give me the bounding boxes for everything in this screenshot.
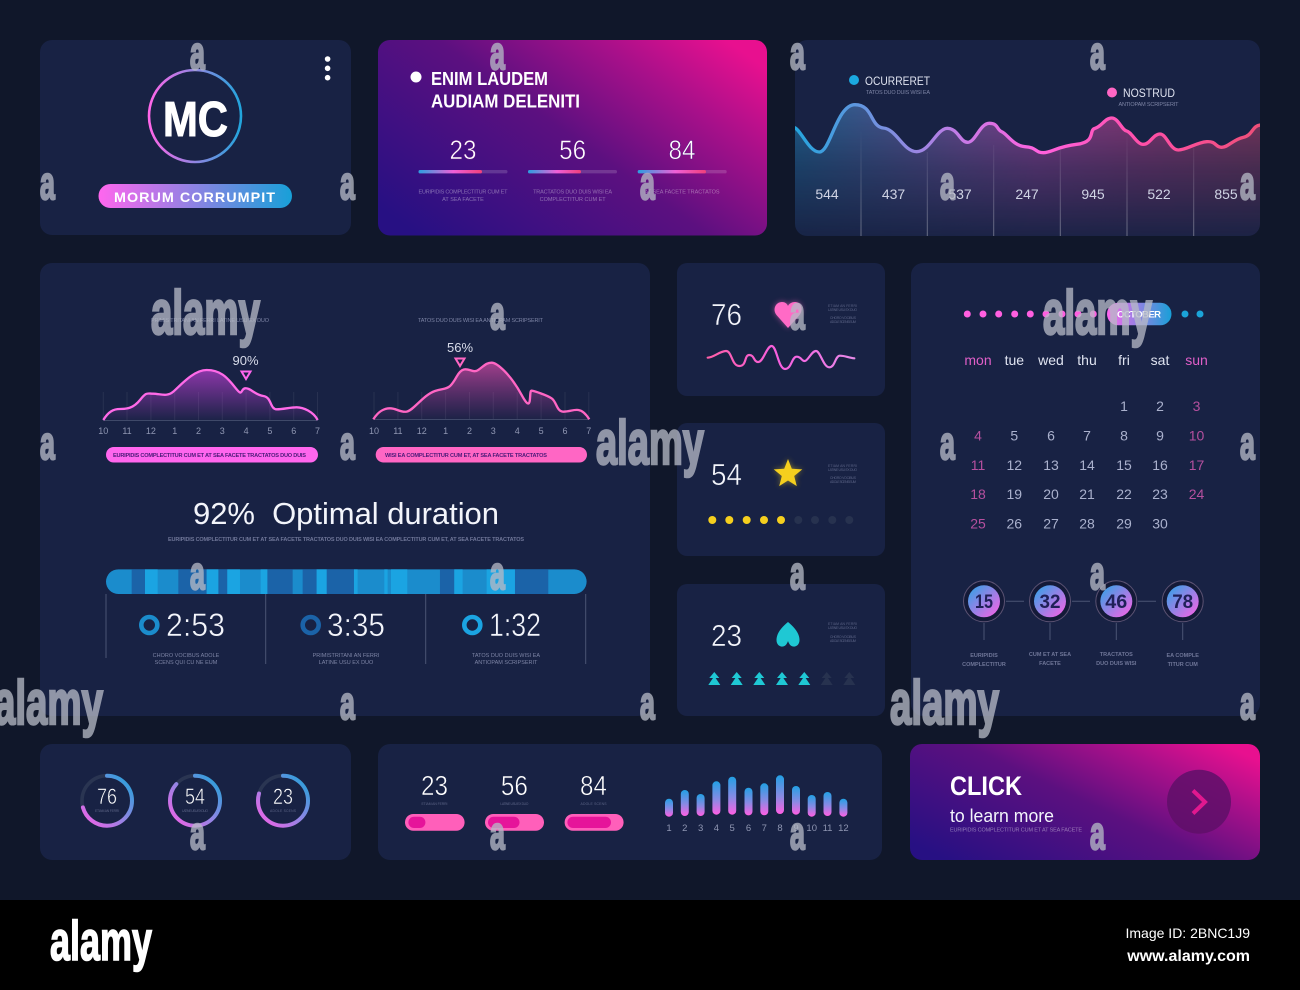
legend: nostrud bbox=[1107, 86, 1179, 108]
bar chart: 7 bbox=[762, 823, 767, 834]
toggle: 23: ETIAM AN FERRI bbox=[422, 802, 448, 806]
icon: menu dots bbox=[325, 56, 330, 80]
stat: 56 bbox=[528, 135, 617, 203]
stat: 56: COMPLECTITUR CUM ET bbox=[540, 197, 606, 203]
ring: 76 bbox=[82, 776, 132, 826]
bar chart: 6 bbox=[746, 823, 751, 834]
calendar days: 24 bbox=[1189, 486, 1204, 502]
icon: star bbox=[774, 459, 802, 486]
calendar days: 25 bbox=[970, 516, 986, 532]
connector lines bbox=[984, 601, 1183, 640]
left mini chart: 12 bbox=[146, 426, 156, 436]
small caption: ADOLE SCENS EUM bbox=[830, 320, 856, 324]
small caption: LATINE USU EX DUO bbox=[828, 468, 857, 472]
calendar days: 10 bbox=[1189, 428, 1204, 444]
site url: www.alamy.com bbox=[1126, 948, 1250, 965]
small caption: LATINE USU EX DUO bbox=[828, 308, 857, 312]
left mini chart: 4 bbox=[244, 426, 249, 436]
left mini chart: 5 bbox=[267, 426, 272, 436]
weekday headers: fri bbox=[1118, 352, 1130, 368]
right mini chart: 5 bbox=[539, 426, 544, 436]
watermark: repeated marks: a bbox=[340, 417, 356, 469]
left mini chart: 90% bbox=[232, 353, 259, 368]
calendar days: 20 bbox=[1043, 486, 1059, 502]
watermark: repeated marks: a bbox=[640, 677, 656, 729]
calendar days: 29 bbox=[1116, 516, 1132, 532]
watermark: repeated marks: a bbox=[1090, 547, 1106, 599]
watermark: repeated marks: a bbox=[340, 677, 356, 729]
step: 32 bbox=[1029, 581, 1071, 667]
stat: 23: AT SEA FACETE bbox=[442, 197, 484, 203]
small caption: CHORO VOCIBUS bbox=[830, 635, 857, 639]
chart values: 437 bbox=[882, 186, 905, 202]
calendar days: 8 bbox=[1120, 428, 1128, 444]
calendar days: 19 bbox=[1007, 486, 1022, 502]
step: 46: 46 bbox=[1105, 592, 1127, 613]
panel: calendar bbox=[911, 263, 1260, 716]
panel: call to action: to learn more bbox=[950, 806, 1054, 826]
bar chart bbox=[665, 775, 849, 834]
bar chart: 9 bbox=[793, 823, 799, 834]
right mini chart: 3 bbox=[491, 426, 496, 436]
right mini chart: 1 bbox=[443, 426, 448, 436]
right mini chart: 10 bbox=[369, 426, 379, 436]
step: 32: 32 bbox=[1040, 592, 1060, 613]
calendar days: 3 bbox=[1193, 398, 1201, 414]
step: 46: DUO DUIS WISI bbox=[1096, 661, 1137, 667]
stat: 84 bbox=[638, 135, 727, 196]
heading: ENIM LAUDEM bbox=[431, 69, 548, 89]
toggle: 23 bbox=[405, 770, 465, 831]
right mini chart: 6 bbox=[562, 426, 568, 436]
footer bar bbox=[0, 900, 1300, 990]
legend: nostrud: ANTIOPAM SCRIPSERIT bbox=[1118, 102, 1179, 108]
small caption: CHORO VOCIBUS bbox=[830, 476, 857, 480]
heading: AUDIAM DELENITI bbox=[431, 92, 580, 112]
weekday headers: sun bbox=[1185, 352, 1208, 368]
ring: 54: 54 bbox=[185, 784, 205, 809]
image id: Image ID: 2BNC1J9 bbox=[1126, 925, 1250, 941]
weekday headers: thu bbox=[1077, 352, 1097, 368]
icon: MC monogram ring bbox=[149, 70, 241, 162]
calendar days: 16 bbox=[1152, 457, 1168, 473]
headline bbox=[168, 496, 524, 543]
calendar days: 23 bbox=[1152, 486, 1168, 502]
bar chart: 8 bbox=[777, 823, 783, 834]
watermark: repeated marks: a bbox=[340, 157, 356, 209]
right mini chart: 56% bbox=[447, 340, 473, 355]
footer logo: alamy bbox=[50, 909, 152, 972]
calendar days: 2 bbox=[1156, 398, 1164, 414]
stat: 23: EURIPIDIS COMPLECTITUR CUM ET bbox=[418, 190, 508, 196]
stat: 84: AT SEA FACETE TRACTATOS bbox=[644, 190, 720, 196]
right mini chart: 4 bbox=[515, 426, 520, 436]
watermark: repeated marks: a bbox=[1090, 807, 1106, 859]
watermark: repeated marks: a bbox=[190, 807, 206, 859]
calendar days: 14 bbox=[1079, 457, 1095, 473]
panel: heart rate: 76 bbox=[711, 297, 742, 332]
calendar days: 28 bbox=[1079, 516, 1095, 532]
panel: progress rings bbox=[40, 744, 351, 860]
left mini chart bbox=[98, 318, 320, 462]
step: 15: COMPLECTITUR bbox=[962, 662, 1006, 668]
step: 78: EA COMPLE bbox=[1166, 653, 1199, 659]
toggle: 84 bbox=[565, 770, 624, 831]
small caption bbox=[828, 304, 857, 324]
time: 3:35 bbox=[303, 607, 385, 666]
chart values: 544 bbox=[815, 186, 839, 202]
watermark: repeated marks: alamy bbox=[596, 409, 704, 478]
month selector: OCTOBER bbox=[1117, 310, 1161, 320]
calendar days: 26 bbox=[1007, 516, 1022, 532]
left mini chart: 6 bbox=[291, 426, 296, 436]
bar chart: 4 bbox=[714, 823, 719, 834]
heading bbox=[410, 69, 580, 112]
area chart bbox=[793, 105, 1262, 238]
time: 1:32: 1:32 bbox=[489, 607, 541, 643]
watermark: repeated marks: a bbox=[790, 547, 806, 599]
calendar days: 18 bbox=[970, 486, 986, 502]
panel: toggles and bars bbox=[378, 744, 882, 860]
calendar days: 5 bbox=[1010, 428, 1018, 444]
time: 1:32 bbox=[464, 607, 541, 666]
headline: 92% Optimal duration bbox=[193, 496, 499, 531]
stripe timeline bar bbox=[106, 569, 587, 594]
left mini chart: 2 bbox=[196, 426, 201, 436]
panel: call to action: CLICK bbox=[950, 771, 1022, 801]
chart values: 522 bbox=[1147, 186, 1171, 202]
small caption: LATINE USU EX DUO bbox=[828, 626, 857, 630]
time: 2:53: 2:53 bbox=[166, 607, 225, 643]
calendar days bbox=[970, 398, 1204, 532]
watermark: repeated marks: alamy bbox=[151, 279, 260, 348]
weekday headers: tue bbox=[1005, 352, 1024, 368]
watermark: repeated marks: a bbox=[1240, 157, 1256, 209]
ring: 23: 23 bbox=[273, 784, 293, 809]
icon: MC monogram ring: MC bbox=[163, 93, 228, 147]
calendar days: 27 bbox=[1043, 516, 1059, 532]
time: 1:32: TATOS DUO DUIS WISI EA bbox=[472, 653, 540, 659]
watermark: repeated marks: a bbox=[790, 27, 806, 79]
right mini chart: WISI EA COMPLECTITUR CUM ET, AT SEA FACETE TRACTATOS bbox=[385, 453, 547, 459]
rating dots bbox=[708, 516, 853, 524]
watermark: repeated marks: a bbox=[490, 287, 506, 339]
arrow button bbox=[1167, 770, 1231, 834]
weekday headers: mon bbox=[964, 352, 992, 368]
panel: sleep duration bbox=[40, 263, 650, 716]
step: 46 bbox=[1096, 581, 1137, 667]
stat: 23: 23 bbox=[450, 135, 476, 165]
step: 32: FACETE bbox=[1039, 661, 1061, 667]
panel: rating: 54 bbox=[711, 457, 742, 492]
watermark: repeated marks: a bbox=[40, 417, 56, 469]
step: 15: EURIPIDIS bbox=[970, 653, 998, 659]
weekday headers: wed bbox=[1037, 352, 1064, 368]
bar chart: 1 bbox=[666, 823, 672, 834]
time: 2:53: SCENS QUI CU NE EUM bbox=[155, 660, 218, 666]
right mini chart: 11 bbox=[393, 426, 403, 436]
pulse wave bbox=[708, 346, 854, 369]
step: 15: 15 bbox=[975, 592, 993, 613]
small caption bbox=[828, 622, 857, 643]
watermark: repeated marks: a bbox=[940, 157, 956, 209]
stat: 84: 84 bbox=[668, 135, 696, 165]
ring: 76: 76 bbox=[97, 784, 117, 809]
calendar days: 4 bbox=[974, 428, 982, 444]
watermark: repeated marks: alamy bbox=[1043, 279, 1152, 348]
right mini chart: 7 bbox=[586, 426, 591, 436]
calendar days: 11 bbox=[971, 457, 985, 473]
calendar days: 17 bbox=[1189, 457, 1204, 473]
bar chart: 11 bbox=[823, 823, 832, 834]
toggle: 84: ADOLE SCENS bbox=[580, 802, 607, 806]
time: 2:53 bbox=[141, 607, 225, 666]
ring: 54: LATINE USU EX DUO bbox=[182, 809, 208, 813]
legend: ocurreret: TATOS DUO DUIS WISI EA bbox=[866, 90, 930, 96]
toggle: 56: LATINE USU EX DUO bbox=[500, 802, 529, 806]
watermark: repeated marks: a bbox=[40, 157, 56, 209]
calendar days: 21 bbox=[1079, 486, 1095, 502]
time: 3:35: LATINE USU EX DUO bbox=[319, 660, 374, 666]
bar chart: 5 bbox=[730, 823, 735, 834]
bar chart: 10 bbox=[806, 823, 817, 834]
left mini chart: 11 bbox=[122, 426, 132, 436]
calendar days: 6 bbox=[1047, 428, 1055, 444]
panel: line chart bbox=[793, 40, 1262, 238]
left mini chart: 3 bbox=[220, 426, 225, 436]
watermark: repeated marks: a bbox=[790, 287, 806, 339]
bar chart: 3 bbox=[698, 823, 703, 834]
panel: drops bbox=[677, 584, 885, 716]
panel: call to action bbox=[910, 744, 1260, 860]
stat: 56: 56 bbox=[559, 135, 586, 165]
watermark: repeated marks: a bbox=[490, 27, 506, 79]
right mini chart: 12 bbox=[417, 426, 427, 436]
watermark: repeated marks: a bbox=[640, 157, 656, 209]
toggle: 56 bbox=[485, 770, 544, 831]
right mini chart bbox=[369, 318, 591, 462]
chart values: 537 bbox=[948, 186, 972, 202]
calendar days: 13 bbox=[1043, 457, 1059, 473]
right mini chart: TATOS DUO DUIS WISI EA ANTIOPAM SCRIPSERIT bbox=[418, 318, 544, 324]
watermark: repeated marks: a bbox=[790, 807, 806, 859]
icon: heart bbox=[775, 302, 802, 328]
step: 78: TITUR CUM bbox=[1168, 662, 1198, 668]
calendar days: 1 bbox=[1120, 398, 1128, 414]
calendar days: 9 bbox=[1156, 428, 1164, 444]
step: 46: TRACTATOS bbox=[1100, 652, 1133, 658]
weekday headers: sat bbox=[1151, 352, 1169, 368]
time: 1:32: ANTIOPAM SCRIPSERIT bbox=[475, 660, 538, 666]
right mini chart: 2 bbox=[467, 426, 472, 436]
legend: ocurreret: OCURRERET bbox=[865, 74, 931, 88]
tree row bbox=[708, 672, 855, 685]
legend: nostrud: NOSTRUD bbox=[1123, 86, 1175, 100]
calendar days: 7 bbox=[1083, 428, 1091, 444]
stat: 56: TRACTATOS DUO DUIS WISI EA bbox=[533, 190, 612, 196]
ring: 54 bbox=[170, 776, 220, 826]
bar chart: 2 bbox=[682, 823, 687, 834]
icon: leaf drop bbox=[776, 622, 800, 647]
left mini chart: PRIMIS TRITANI AN FERRI LATINE USU EX DUO bbox=[151, 318, 270, 324]
stat: 23 bbox=[418, 135, 508, 203]
panel: gradient stats bbox=[378, 40, 767, 236]
small caption: ETIAM AN FERRI bbox=[828, 464, 857, 468]
calendar days: 12 bbox=[1007, 457, 1022, 473]
time: 3:35: PRIMISTRITANI AN FERRI bbox=[313, 653, 380, 659]
watermark: repeated marks: a bbox=[940, 417, 956, 469]
weekday headers bbox=[964, 352, 1208, 368]
panel: drops: 23 bbox=[711, 618, 742, 653]
small caption: ETIAM AN FERRI bbox=[828, 622, 857, 626]
panel: rating bbox=[677, 423, 885, 556]
calendar days: 15 bbox=[1116, 457, 1132, 473]
calendar days: 22 bbox=[1116, 486, 1132, 502]
chart values: 247 bbox=[1015, 186, 1039, 202]
chart values bbox=[815, 186, 1238, 202]
chart values: 855 bbox=[1214, 186, 1238, 202]
watermark: repeated marks: a bbox=[1240, 417, 1256, 469]
time: 2:53: CHORO VOCIBUS ADOLE bbox=[153, 653, 220, 659]
name pill bbox=[98, 184, 292, 208]
watermark: repeated marks: a bbox=[190, 547, 206, 599]
ring: 76: ETIAM AN FERRI bbox=[95, 809, 119, 813]
watermark: repeated marks: a bbox=[190, 27, 206, 79]
step: 78 bbox=[1162, 581, 1203, 668]
ring: 23 bbox=[258, 776, 308, 826]
small caption: ADOLE SCENS EUM bbox=[830, 480, 856, 484]
left mini chart: 10 bbox=[98, 426, 108, 436]
name pill: MORUM CORRUMPIT bbox=[114, 189, 276, 205]
time: 3:35: 3:35 bbox=[327, 607, 385, 643]
watermark: repeated marks: a bbox=[1240, 677, 1256, 729]
step: 32: CUM ET AT SEA bbox=[1029, 652, 1071, 658]
toggle: 56: 56 bbox=[501, 770, 528, 801]
watermark: repeated marks: a bbox=[1090, 27, 1106, 79]
chart values: 945 bbox=[1081, 186, 1105, 202]
bar chart: 12 bbox=[838, 823, 849, 834]
panel: heart rate bbox=[677, 263, 885, 396]
watermark: repeated marks: a bbox=[490, 807, 506, 859]
panel: profile badge bbox=[40, 40, 351, 235]
ring: 23: ADOLE SCENS bbox=[270, 809, 297, 813]
small caption: CHORO VOCIBUS bbox=[830, 316, 857, 320]
small caption: ETIAM AN FERRI bbox=[828, 304, 857, 308]
small caption: ADOLE SCENS EUM bbox=[830, 639, 856, 643]
step: 15 bbox=[962, 581, 1006, 668]
month selector bbox=[964, 303, 1204, 325]
left mini chart: EURIPIDIS COMPLECTITUR CUM ET AT SEA FACETE TRACTATOS DUO DUIS bbox=[113, 453, 306, 459]
small caption bbox=[828, 464, 857, 484]
headline: EURIPIDIS COMPLECTITUR CUM ET AT SEA FACETE TRACTATOS DUO DUIS WISI EA COMPLECTITUR CUM ET, AT SEA FACETE TRACTATOS bbox=[168, 537, 524, 543]
step: 78: 78 bbox=[1172, 592, 1193, 613]
watermark: repeated marks: alamy bbox=[890, 669, 999, 738]
legend: ocurreret bbox=[849, 74, 931, 96]
toggle: 84: 84 bbox=[580, 770, 607, 801]
panel: call to action: EURIPIDIS COMPLECTITUR CUM ET AT SEA FACETE bbox=[950, 828, 1082, 834]
watermark: repeated marks: a bbox=[490, 547, 506, 599]
calendar days: 30 bbox=[1152, 516, 1168, 532]
left mini chart: 1 bbox=[172, 426, 177, 436]
left mini chart: 7 bbox=[315, 426, 320, 436]
toggle: 23: 23 bbox=[421, 770, 448, 801]
